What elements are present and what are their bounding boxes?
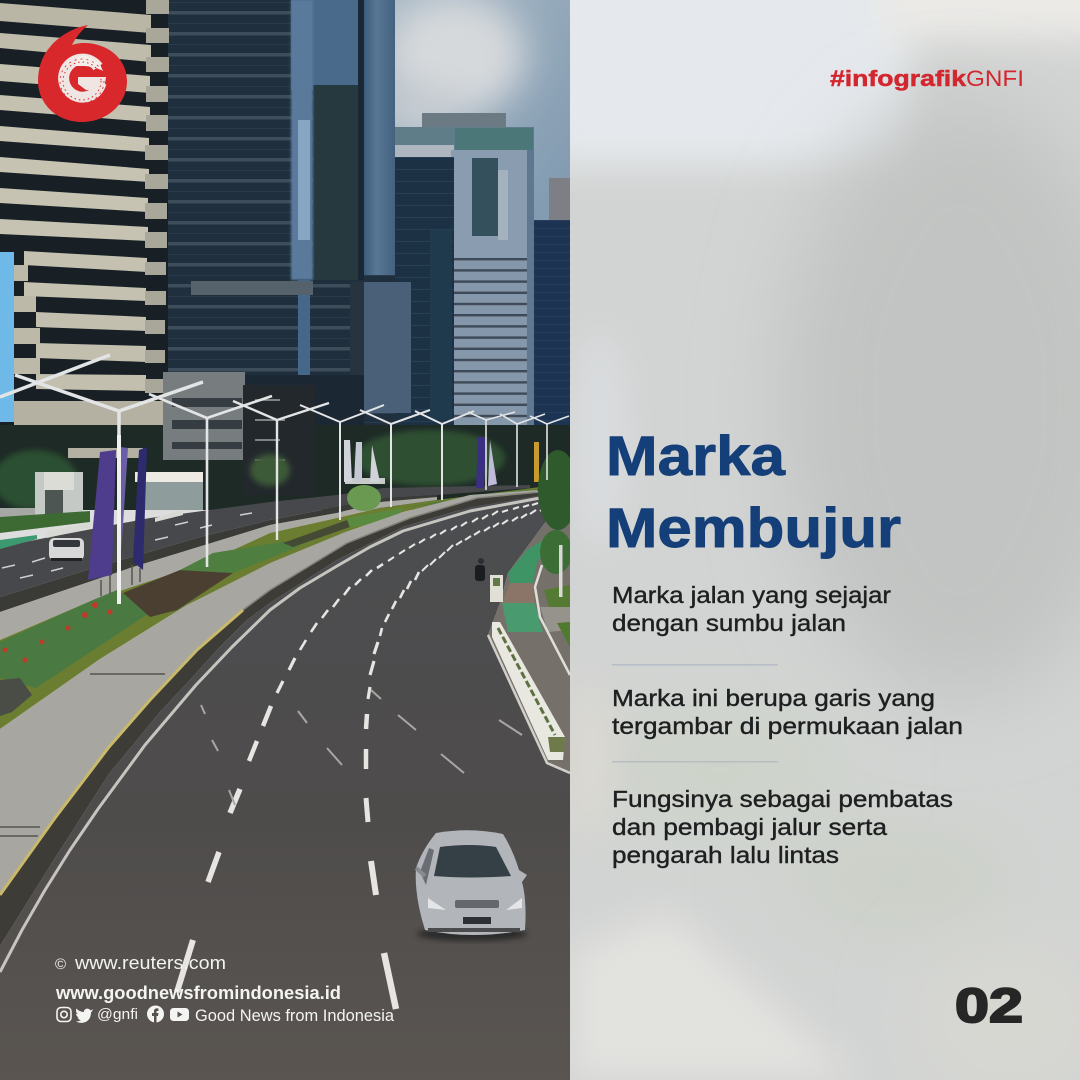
icon: youtube (170, 1008, 189, 1021)
text block: function (612, 786, 953, 868)
icon: facebook (147, 1006, 164, 1023)
photo credit: www.reuters.com (74, 953, 226, 973)
road curbs and dashes on the upper road (2, 510, 252, 578)
photo credit: © (55, 956, 66, 973)
panel: photo of the city road (0, 0, 578, 1080)
text block: form: Marka ini berupa garis yang (612, 685, 935, 711)
heading (606, 424, 901, 559)
concrete barrier (0, 492, 540, 946)
busway (0, 490, 540, 895)
icon: instagram (57, 1008, 71, 1022)
right sidewalk with green cycle lane (488, 500, 570, 773)
lane markings (177, 503, 546, 1009)
street lamps (0, 354, 570, 567)
far flags and trees along the road (344, 437, 539, 511)
text block: definition (612, 582, 891, 636)
blue billboard (0, 252, 14, 422)
label: page name: Good News from Indonesia (195, 1007, 395, 1025)
text block: function: pengarah lalu lintas (612, 842, 839, 868)
social row (57, 1006, 395, 1025)
panel: blurred right side (540, 0, 1080, 1080)
hashtag: #infografik GNFI (830, 66, 1024, 91)
beige striped building (0, 0, 169, 430)
sky with clouds (395, 0, 570, 220)
website: www.goodnewsfromindonesia.id (55, 983, 341, 1003)
blurred tones (540, 0, 1080, 1080)
heading: Marka (606, 424, 786, 487)
text block: definition: dengan sumbu jalan (612, 610, 846, 636)
purple flags (88, 435, 147, 604)
motorcyclist (475, 558, 485, 581)
icon: white garuda ring (60, 55, 106, 103)
text block: function: Fungsinya sebagai pembatas (612, 786, 953, 812)
silver car (416, 830, 527, 941)
green cycle lane far left (0, 535, 37, 549)
divider on the upper road (0, 495, 437, 612)
far right buildings (534, 178, 570, 435)
page number: 02 (955, 980, 1023, 1033)
logo: GNFI red 6 with white garuda (38, 25, 127, 122)
text block: definition: Marka jalan yang sejajar (612, 582, 891, 608)
icon: twitter (76, 1008, 93, 1023)
road edge line (0, 498, 540, 972)
text block: form (612, 685, 963, 739)
side lane (0, 497, 437, 640)
planted median (0, 487, 540, 729)
label: gnfi handle: @gnfi (97, 1006, 138, 1023)
main road (0, 495, 570, 1080)
upper road (0, 485, 530, 597)
glass tower (165, 0, 411, 440)
heading: Membujur (606, 496, 901, 559)
low buildings and trees (0, 372, 570, 533)
text block: form: tergambar di permukaan jalan (612, 713, 963, 739)
white car on the upper road (49, 538, 84, 561)
right tree (538, 450, 570, 597)
glass and grey tower group (394, 113, 534, 430)
text block: function: dan pembagi jalur serta (612, 814, 887, 840)
